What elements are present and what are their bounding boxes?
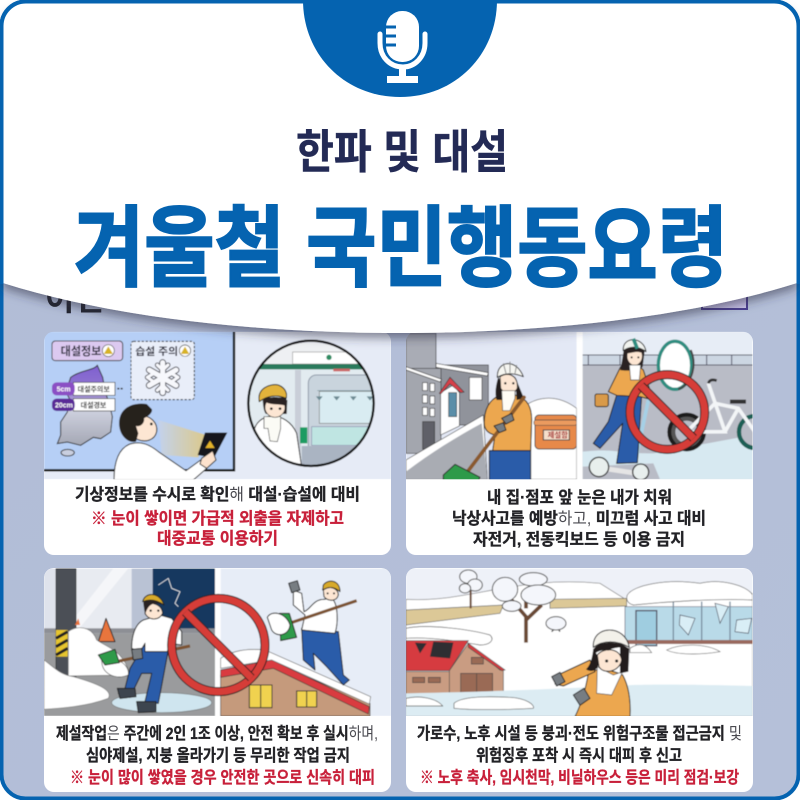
caption: snow removal: 심야제설, 지붕 올라가기 등 무리한 작업 금지 xyxy=(86,746,350,765)
illustration: weather map and subway: 대설경보 xyxy=(81,401,107,410)
snowflake xyxy=(147,363,178,393)
panel: stay away from dangerous structures xyxy=(406,568,753,792)
caption: clear snow: 낙상사고를 예방하고, 미끄럼 사고 대비 xyxy=(452,509,706,528)
caption: clear snow: 자전거, 전동킥보드 등 이용 금지 xyxy=(473,530,685,549)
illustration: weather map and subway: 습설 주의 xyxy=(135,346,178,358)
subtitle: 한파 및 대설 xyxy=(296,126,508,178)
illustration: shoveling and no scooter xyxy=(406,332,771,481)
caption: dangerous structures xyxy=(417,724,742,787)
illustration: collapsed structures in snow xyxy=(406,568,753,717)
header panel xyxy=(2,0,798,333)
illustration: snow removal and no roof climbing xyxy=(44,568,391,716)
heading fragment hidden behind header xyxy=(45,281,747,317)
caption: weather information: 대중교통 이용하기 xyxy=(157,529,278,548)
caption: weather information: ※ 눈이 쌓이면 가급적 외출을 자제하고 xyxy=(91,509,344,528)
panel: check weather information xyxy=(44,332,391,555)
caption: dangerous structures: ※ 노후 축사, 임시천막, 비닐하우스 등은 미리 점검·보강 xyxy=(420,768,739,787)
illustration: weather map and subway xyxy=(44,332,391,480)
illustration: weather map and subway: 대설정보 xyxy=(61,344,101,358)
caption: weather information: 기상정보를 수시로 확인해 대설·습설에 대비 xyxy=(75,485,360,504)
illustration: weather map and subway: 대설주의보 xyxy=(78,385,110,394)
panel: clear snow and prevent slipping xyxy=(406,332,771,555)
icon: microphone xyxy=(380,11,425,83)
caption: weather information xyxy=(75,485,360,548)
caption: snow removal xyxy=(56,724,378,787)
panel: safe snow removal xyxy=(44,568,391,792)
caption: snow removal: 제설작업은 주간에 2인 1조 이상, 안전 확보 후 실시하며, xyxy=(56,724,378,743)
caption: snow removal: ※ 눈이 많이 쌓였을 경우 안전한 곳으로 신속히 대피 xyxy=(70,768,375,787)
heading fragment hidden behind header: 이번 xyxy=(45,281,104,317)
caption: clear snow: 내 집·점포 앞 눈은 내가 치워 xyxy=(487,488,672,507)
caption: dangerous structures: 가로수, 노후 시설 등 붕괴·전도 위험구조물 접근금지 및 xyxy=(417,724,742,743)
caption: dangerous structures: 위험징후 포착 시 즉시 대피 후 신고 xyxy=(476,746,682,765)
microphone badge xyxy=(303,0,497,97)
illustration: weather map and subway: 20cm xyxy=(55,402,73,409)
illustration: shoveling and no scooter: 제설함 xyxy=(548,431,568,440)
caption: clear snow xyxy=(452,488,706,549)
illustration: weather map and subway: 5cm xyxy=(57,386,71,393)
